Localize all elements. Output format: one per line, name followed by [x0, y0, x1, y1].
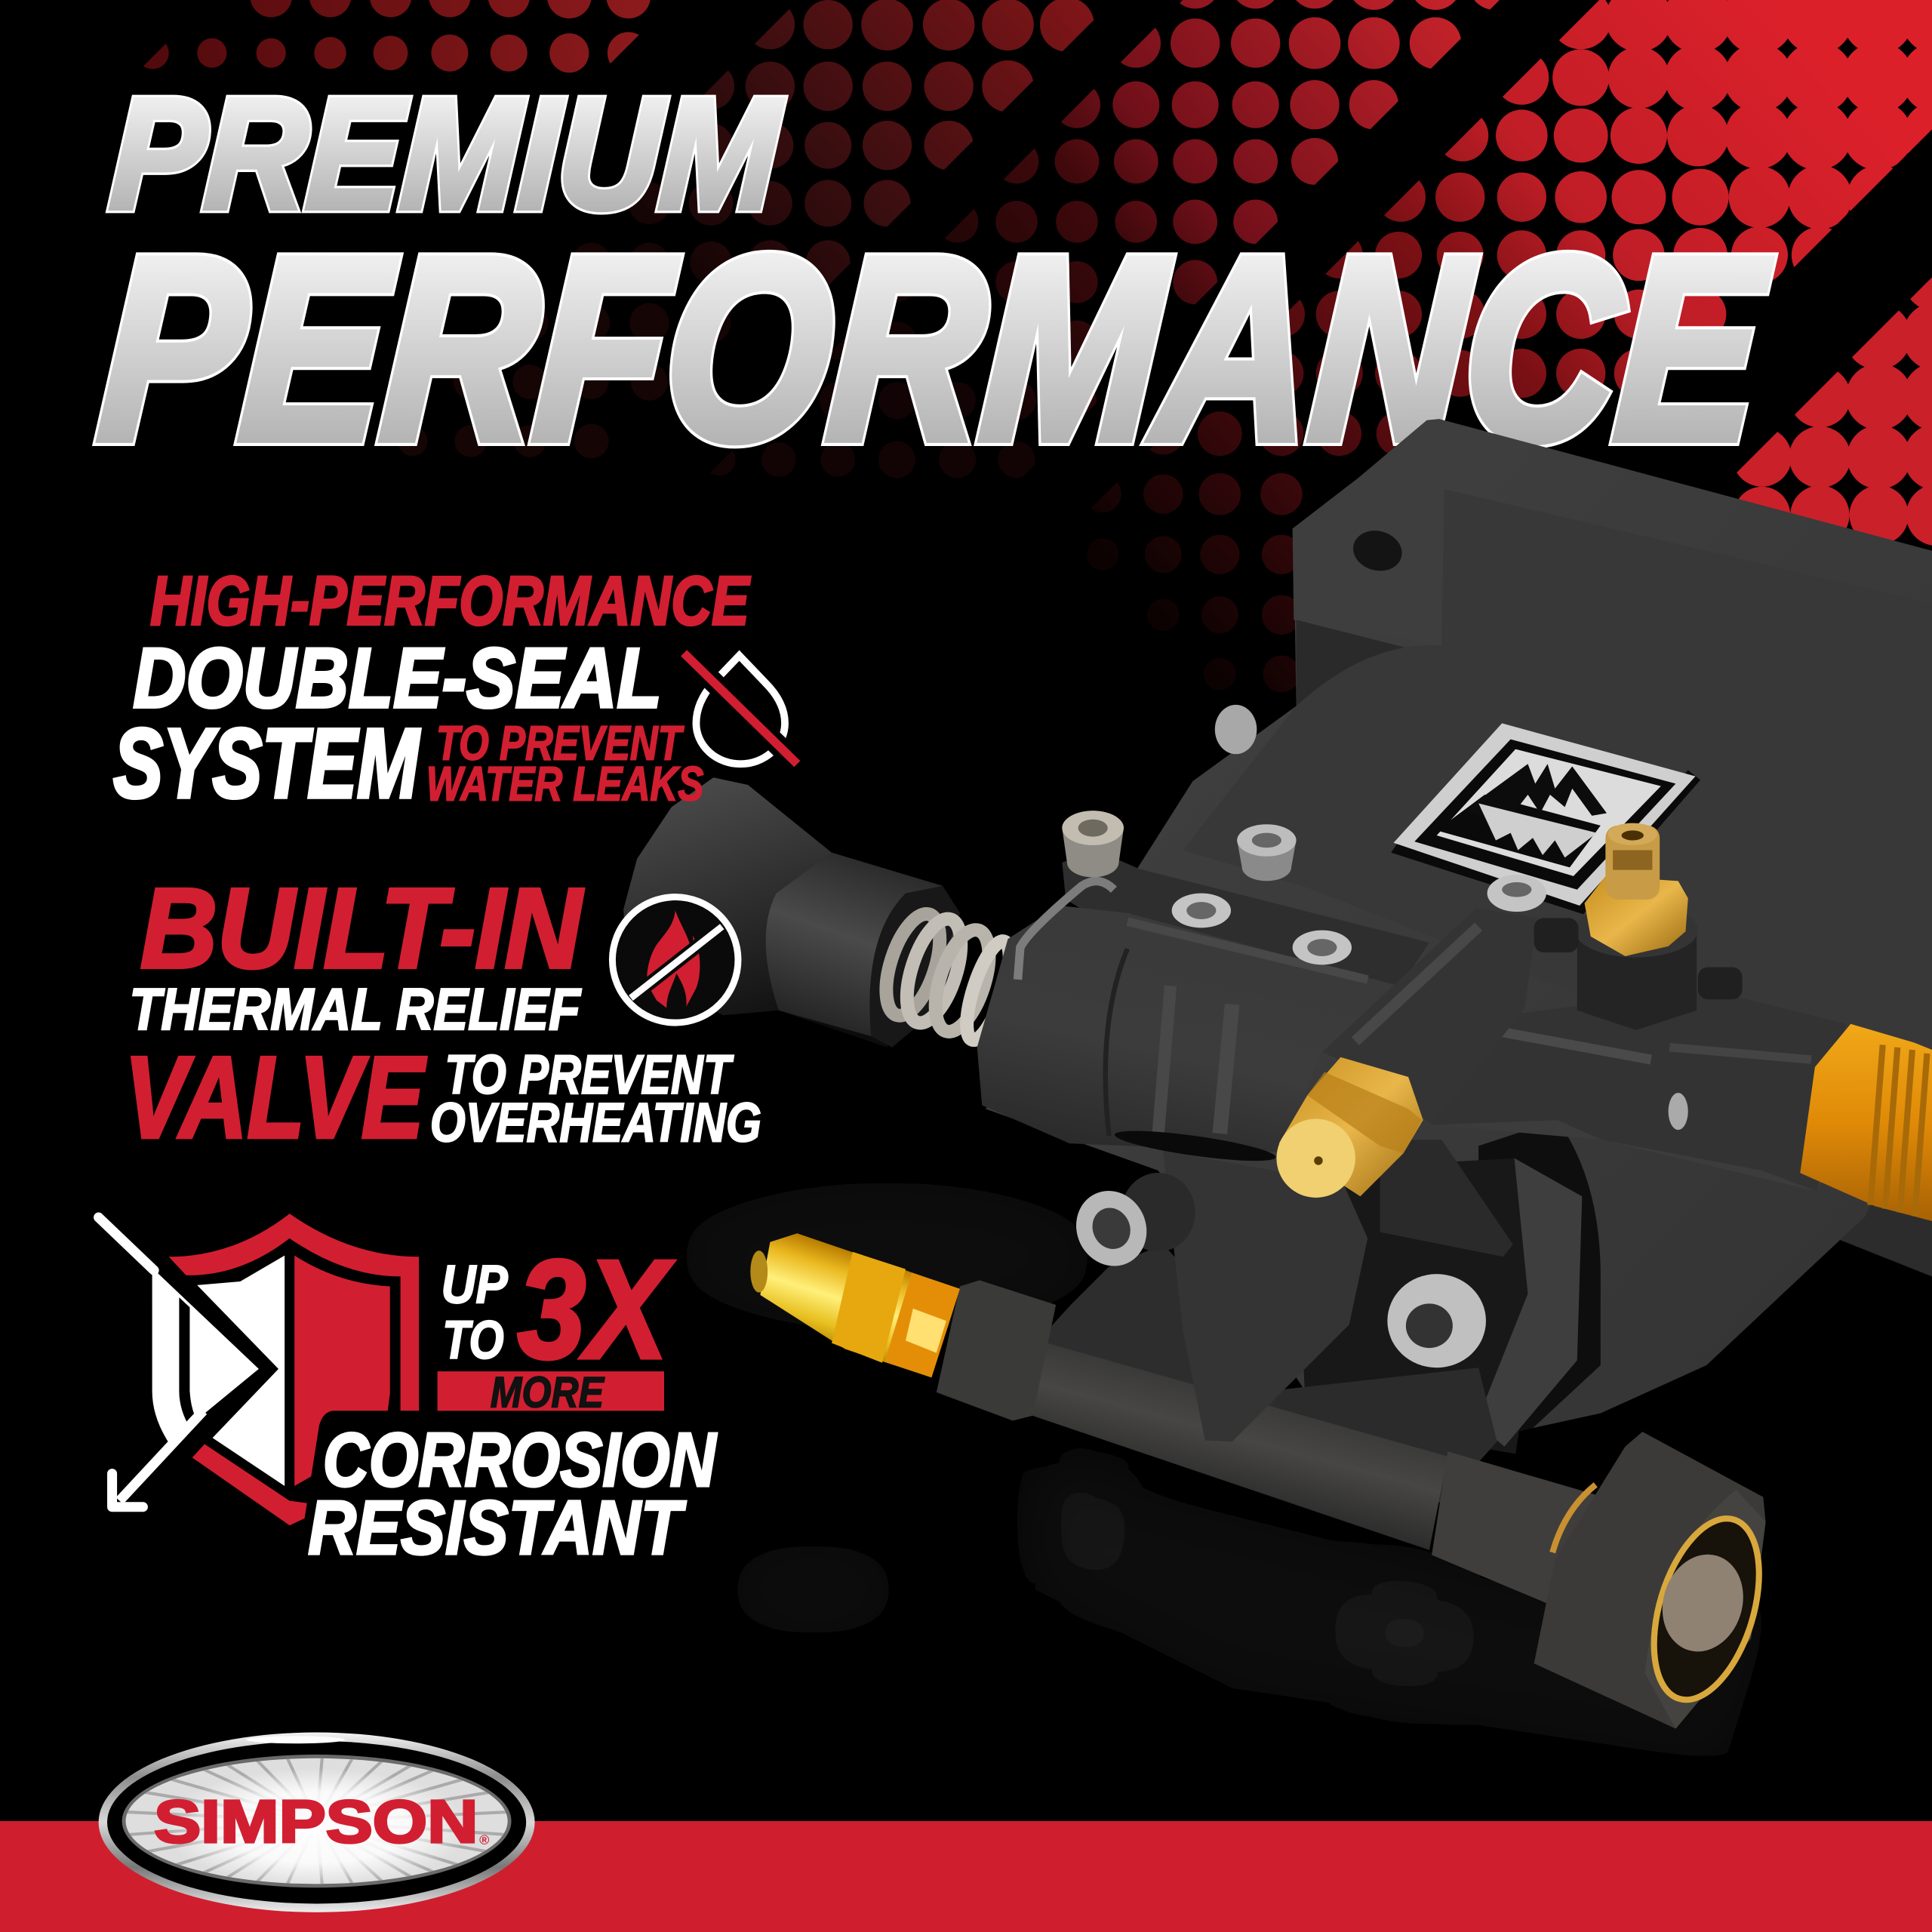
feature: double-seal system — [113, 563, 797, 818]
highlight — [247, 1736, 345, 1743]
strainer nut — [1534, 1432, 1779, 1729]
blurred pump reflection — [678, 1183, 1774, 1762]
feature: double-seal system: DOUBLE-SEAL — [133, 630, 662, 725]
brand logo: SIMPSON oval badge: SIMPSON — [154, 1788, 478, 1855]
title: PREMIUM: PREMIUM — [106, 66, 785, 242]
manifold — [977, 851, 1846, 1192]
icon: flame with slash — [612, 897, 738, 1023]
brand logo: SIMPSON oval badge: ® — [479, 1832, 489, 1847]
halftone dots band: bright — [1084, 0, 1932, 746]
feature: corrosion resistant: MORE — [491, 1368, 605, 1417]
feature: double-seal system: WATER LEAKS — [426, 757, 703, 811]
feature: double-seal system: SYSTEM — [113, 708, 421, 818]
icon: shield with deflected arrow — [99, 1214, 419, 1527]
feature: corrosion resistant: 3X — [518, 1232, 675, 1388]
feature: corrosion resistant: RESISTANT — [308, 1485, 686, 1571]
footer red bar — [0, 1821, 1932, 1932]
lower block and bottom tube — [937, 1140, 1599, 1607]
feature: thermal relief valve: BUILT-IN — [140, 865, 584, 992]
halftone dots band: far left — [137, 0, 651, 74]
feature: thermal relief valve: TO PREVENT — [445, 1043, 734, 1106]
gold connector left — [750, 1233, 960, 1377]
feature: thermal relief valve: OVERHEATING — [430, 1091, 761, 1154]
icon: water drop with slash — [684, 653, 797, 764]
feature: thermal relief valve: THERMAL RELIEF — [129, 976, 582, 1042]
brand logo: SIMPSON oval badge — [99, 1733, 535, 1912]
pump housing block — [986, 419, 1932, 1441]
feature: corrosion resistant: CORROSION — [323, 1417, 717, 1503]
feature: thermal relief valve — [125, 865, 761, 1162]
feature: double-seal system: HIGH-PERFORMANCE — [150, 563, 751, 640]
feature: thermal relief valve: VALVE — [125, 1032, 426, 1162]
wire handle — [1018, 881, 1114, 980]
halftone dots band: second — [398, 0, 1094, 458]
feature: corrosion resistant: TO — [442, 1310, 504, 1371]
title: PREMIUM: PREMIUM — [106, 66, 785, 242]
brass nozzle front — [1276, 1057, 1423, 1198]
brass fitting right — [1800, 1024, 1932, 1221]
spring — [875, 908, 1018, 1044]
brass fitting top — [1585, 823, 1688, 956]
logo plate — [1391, 723, 1700, 914]
feature: corrosion resistant: UP — [441, 1255, 509, 1315]
halftone dots band: third — [703, 0, 1521, 478]
more bar — [438, 1371, 664, 1411]
feature: corrosion resistant — [99, 1214, 717, 1571]
left piston hub — [623, 777, 960, 1048]
bolts — [1062, 705, 1688, 1130]
halftone dots band: lower right — [1737, 278, 1932, 546]
product photo: pressure washer pump — [623, 419, 1932, 1729]
feature: double-seal system: TO PREVENT — [436, 717, 685, 771]
